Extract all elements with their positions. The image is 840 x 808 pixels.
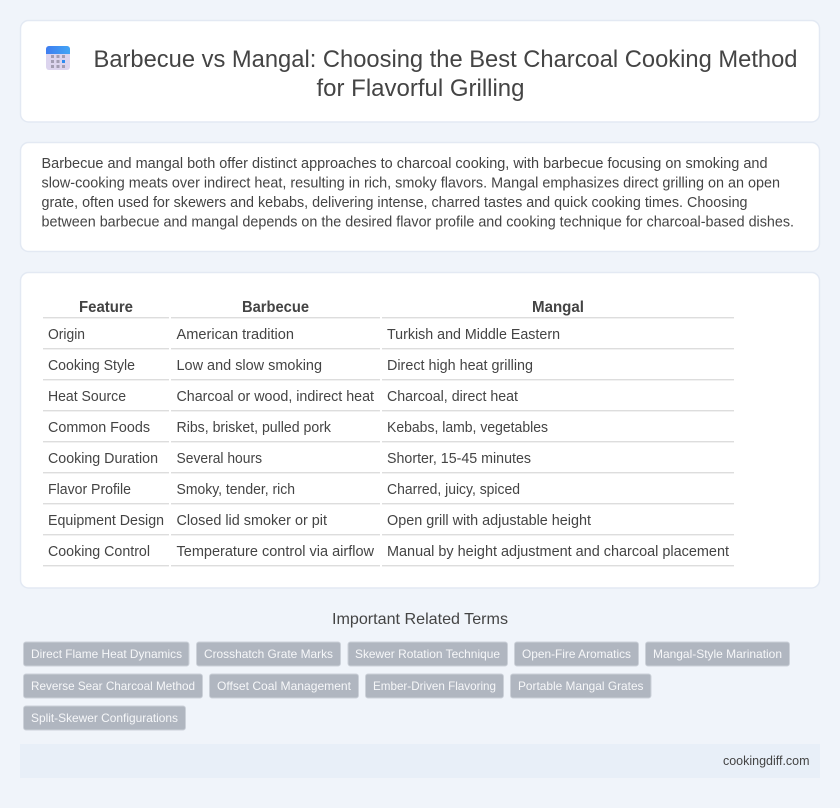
- table row: cooking style: Cooking Style: [48, 358, 135, 374]
- tag: split-skewer configurations: Split-Skewer Configurations: [31, 711, 178, 725]
- table row: origin: American tradition: [176, 327, 294, 343]
- table header row: Mangal: [532, 299, 584, 316]
- table header row: [43, 299, 734, 318]
- panel: introduction: [20, 142, 820, 252]
- table row: cooking control: Temperature control via airflow: [176, 544, 375, 560]
- tag: split-skewer configurations: [24, 706, 186, 730]
- table row: cooking style: Low and slow smoking: [176, 358, 322, 374]
- heading: important related terms: Important Related Terms: [332, 611, 508, 628]
- icon: calendar: [46, 46, 70, 70]
- text block: introduction: slow-cooking meats over indirect heat, resulting in rich, smoky flavors. Mangal emphasizes direct grilling on an open: [42, 176, 780, 192]
- tag: ember-driven flavoring: Ember-Driven Flavoring: [373, 679, 496, 693]
- table row: cooking duration: Shorter, 15-45 minutes: [387, 451, 531, 467]
- tag: reverse sear charcoal method: Reverse Sear Charcoal Method: [31, 679, 195, 693]
- table row: equipment design: Equipment Design: [48, 513, 164, 529]
- table row: heat source: [43, 389, 734, 411]
- table row: common foods: Common Foods: [48, 420, 150, 436]
- table row: origin: Turkish and Middle Eastern: [387, 327, 560, 343]
- table header row: Barbecue: [242, 299, 309, 316]
- title: for Flavorful Grilling: [316, 75, 524, 102]
- table row: equipment design: [43, 513, 734, 535]
- table row: cooking duration: [43, 451, 734, 473]
- table row: flavor profile: Smoky, tender, rich: [176, 482, 295, 498]
- table row: equipment design: Open grill with adjustable height: [387, 513, 591, 529]
- table row: common foods: [43, 420, 734, 442]
- panel: comparison table: [20, 272, 820, 588]
- tag: open-fire aromatics: [514, 642, 638, 666]
- panel: header: [20, 20, 820, 122]
- tag: portable mangal grates: Portable Mangal Grates: [518, 679, 644, 693]
- tag: direct flame heat dynamics: [24, 642, 189, 666]
- table row: equipment design: Closed lid smoker or pit: [176, 513, 327, 529]
- table row: cooking control: [43, 544, 734, 566]
- tag: crosshatch grate marks: Crosshatch Grate Marks: [204, 647, 333, 661]
- tag: skewer rotation technique: [348, 642, 508, 666]
- tag: mangal-style marination: [646, 642, 790, 666]
- tag: ember-driven flavoring: [366, 674, 504, 698]
- table row: flavor profile: [43, 482, 734, 504]
- table row: flavor profile: Charred, juicy, spiced: [387, 482, 520, 498]
- tag: direct flame heat dynamics: Direct Flame Heat Dynamics: [31, 647, 182, 661]
- table row: cooking style: [43, 358, 734, 380]
- table row: cooking duration: Several hours: [176, 451, 262, 467]
- table row: heat source: Charcoal or wood, indirect heat: [176, 389, 374, 405]
- tag: skewer rotation technique: Skewer Rotation Technique: [355, 647, 500, 661]
- text block: introduction: Barbecue and mangal both offer distinct approaches to charcoal cooking, with barbecue focusing on smoking and: [42, 156, 768, 172]
- tag: reverse sear charcoal method: [24, 674, 202, 698]
- table header row: Feature: [79, 299, 133, 316]
- footer credit: cookingdiff.com: [723, 754, 810, 768]
- tag: crosshatch grate marks: [196, 642, 340, 666]
- table row: common foods: Ribs, brisket, pulled pork: [176, 420, 332, 436]
- tag: mangal-style marination: Mangal-Style Marination: [653, 647, 782, 661]
- table row: flavor profile: Flavor Profile: [48, 482, 131, 498]
- table row: origin: Origin: [48, 327, 85, 343]
- title: [94, 46, 798, 102]
- tag: open-fire aromatics: Open-Fire Aromatics: [522, 647, 631, 661]
- text block: introduction: grate, often used for skewers and kebabs, delivering intense, charred tastes and quick cooking times. Choosing: [42, 195, 748, 211]
- text block: introduction: between barbecue and mangal depends on the desired flavor profile and cooking technique for charcoal-based dishes.: [42, 214, 794, 230]
- table row: cooking control: Cooking Control: [48, 544, 150, 560]
- table row: heat source: Charcoal, direct heat: [387, 389, 518, 405]
- table row: origin: [43, 327, 734, 349]
- table row: cooking duration: Cooking Duration: [48, 451, 158, 467]
- table row: heat source: Heat Source: [48, 389, 126, 405]
- table row: cooking control: Manual by height adjustment and charcoal placement: [387, 544, 729, 560]
- text block: introduction: [42, 156, 794, 230]
- footer: [20, 744, 820, 778]
- table row: common foods: Kebabs, lamb, vegetables: [387, 420, 548, 436]
- tag: offset coal management: Offset Coal Management: [217, 679, 352, 693]
- table row: cooking style: Direct high heat grilling: [387, 358, 533, 374]
- title: Barbecue vs Mangal: Choosing the Best Charcoal Cooking Method: [94, 46, 798, 73]
- tag: portable mangal grates: [510, 674, 651, 698]
- tag: offset coal management: [210, 674, 358, 698]
